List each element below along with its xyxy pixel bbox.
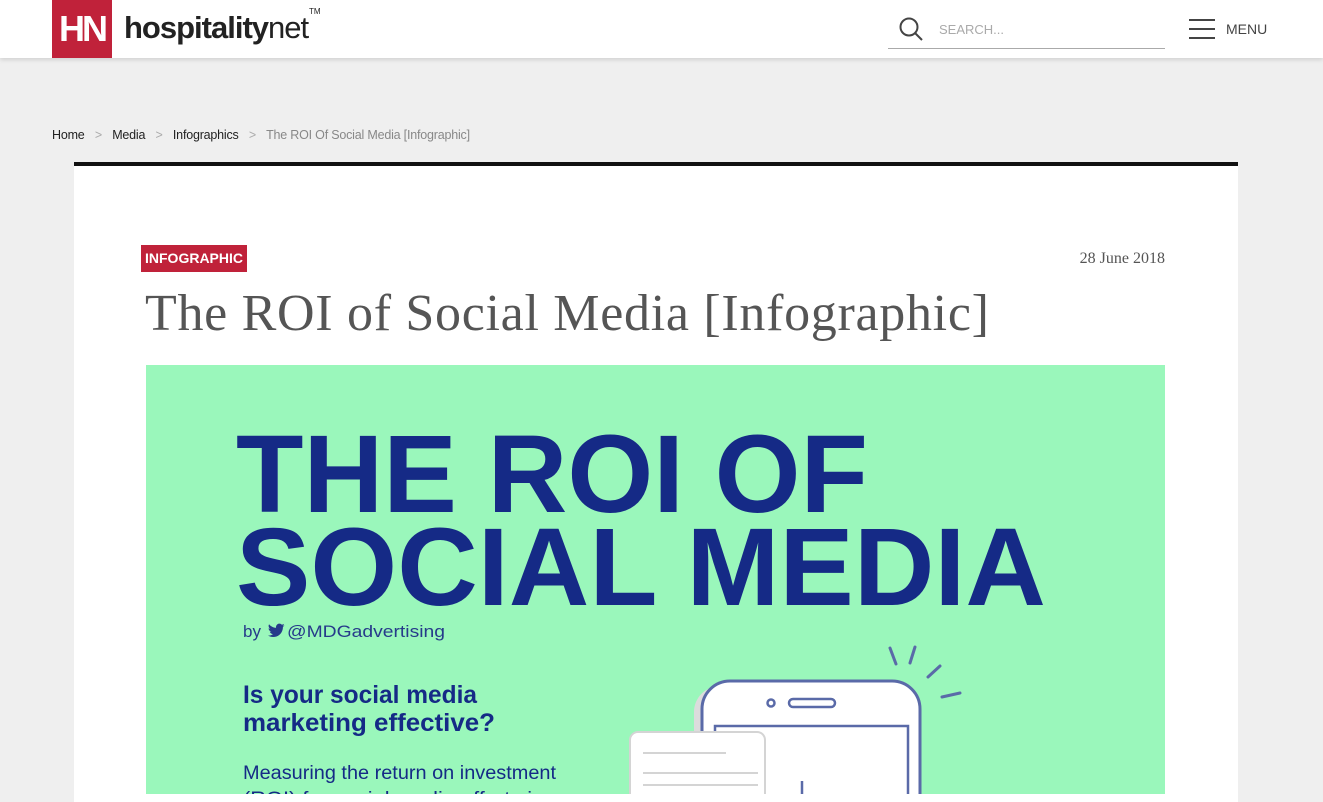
main title [236,413,1046,629]
menu [1189,19,1267,39]
phone illustration [630,647,960,802]
search: SEARCH... [939,22,1004,37]
search [888,12,1165,49]
intro text: Measuring the return on investment [243,763,557,784]
menu: MENU [1226,21,1267,37]
logo: HN [59,8,105,49]
infographic [146,365,1165,794]
tag: INFOGRAPHIC [145,250,243,266]
article card [74,162,1238,802]
main title: SOCIAL MEDIA [236,506,1046,629]
question heading: marketing effective? [243,709,495,737]
date: 28 June 2018 [1080,250,1165,267]
intro text [243,763,557,802]
question heading [243,681,495,737]
article title: The ROI of Social Media [Infographic] [145,285,990,342]
tag [141,245,247,272]
main title: THE ROI OF [236,413,868,536]
byline [243,622,445,641]
header bar [0,0,1323,58]
byline: by [243,622,261,641]
logo: TM [309,7,321,16]
breadcrumb: Home > Media > Infographics > The ROI Of Social Media [Infographic] [52,128,470,142]
byline: @MDGadvertising [287,622,445,641]
chat bubble [630,732,765,802]
question heading: Is your social media [243,681,478,709]
logo: hospitalitynet [124,10,308,45]
logo [52,0,321,58]
